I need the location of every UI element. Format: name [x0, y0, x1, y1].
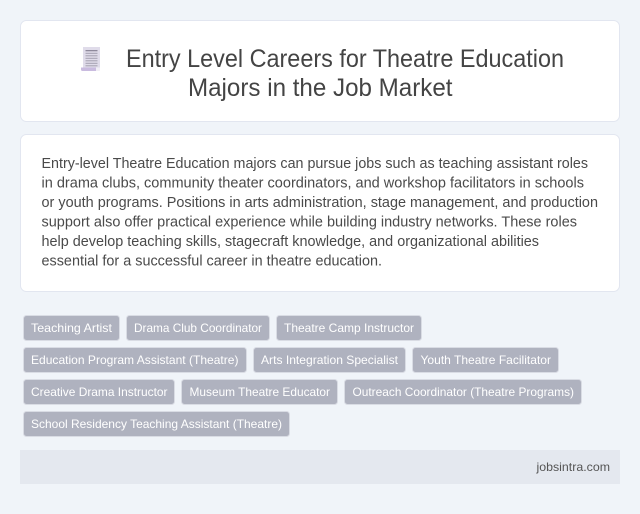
- tag: School Residency Teaching Assistant (Theatre): [31, 417, 282, 431]
- tag: Teaching Artist: [31, 321, 113, 335]
- tag: [276, 316, 422, 340]
- footer: [20, 450, 620, 484]
- icon: paper scroll: [81, 47, 100, 71]
- description text: or youth programs. Positions in arts administration, stage management, and production: [42, 195, 598, 211]
- tag: Museum Theatre Educator: [190, 385, 330, 399]
- tag: Education Program Assistant (Theatre): [31, 353, 238, 367]
- tag: Youth Theatre Facilitator: [420, 353, 551, 367]
- title: [126, 45, 564, 102]
- tag: [182, 380, 338, 404]
- title: Majors in the Job Market: [188, 74, 453, 102]
- tag: Creative Drama Instructor: [31, 385, 168, 399]
- tag: Arts Integration Specialist: [261, 353, 399, 367]
- description text: support also offer practical experience while building industry networks. These roles: [42, 214, 577, 230]
- footer: jobsintra.com: [535, 460, 610, 474]
- description text: Entry-level Theatre Education majors can pursue jobs such as teaching assistant roles: [42, 156, 588, 172]
- tag: Drama Club Coordinator: [134, 321, 262, 335]
- description text: help develop teaching skills, stagecraft knowledge, and organizational abilities: [42, 234, 539, 250]
- tag: [126, 316, 270, 340]
- tag: Outreach Coordinator (Theatre Programs): [352, 385, 574, 399]
- tag: [412, 348, 558, 372]
- tag: [344, 380, 582, 404]
- description text: in drama clubs, community theater coordinators, and workshop facilitators in schools: [42, 176, 584, 192]
- title: Entry Level Careers for Theatre Education: [126, 45, 564, 73]
- description text: [42, 156, 598, 270]
- panel: career tags: [24, 316, 582, 436]
- tag: [254, 348, 406, 372]
- description text: essential for a successful career in theatre education.: [42, 254, 382, 270]
- tag: Theatre Camp Instructor: [284, 321, 414, 335]
- panel: title card: [20, 20, 620, 122]
- tag: [24, 412, 290, 436]
- tag: [24, 380, 174, 404]
- tag: [24, 316, 120, 340]
- panel: description card: [20, 134, 620, 292]
- tag: [24, 348, 246, 372]
